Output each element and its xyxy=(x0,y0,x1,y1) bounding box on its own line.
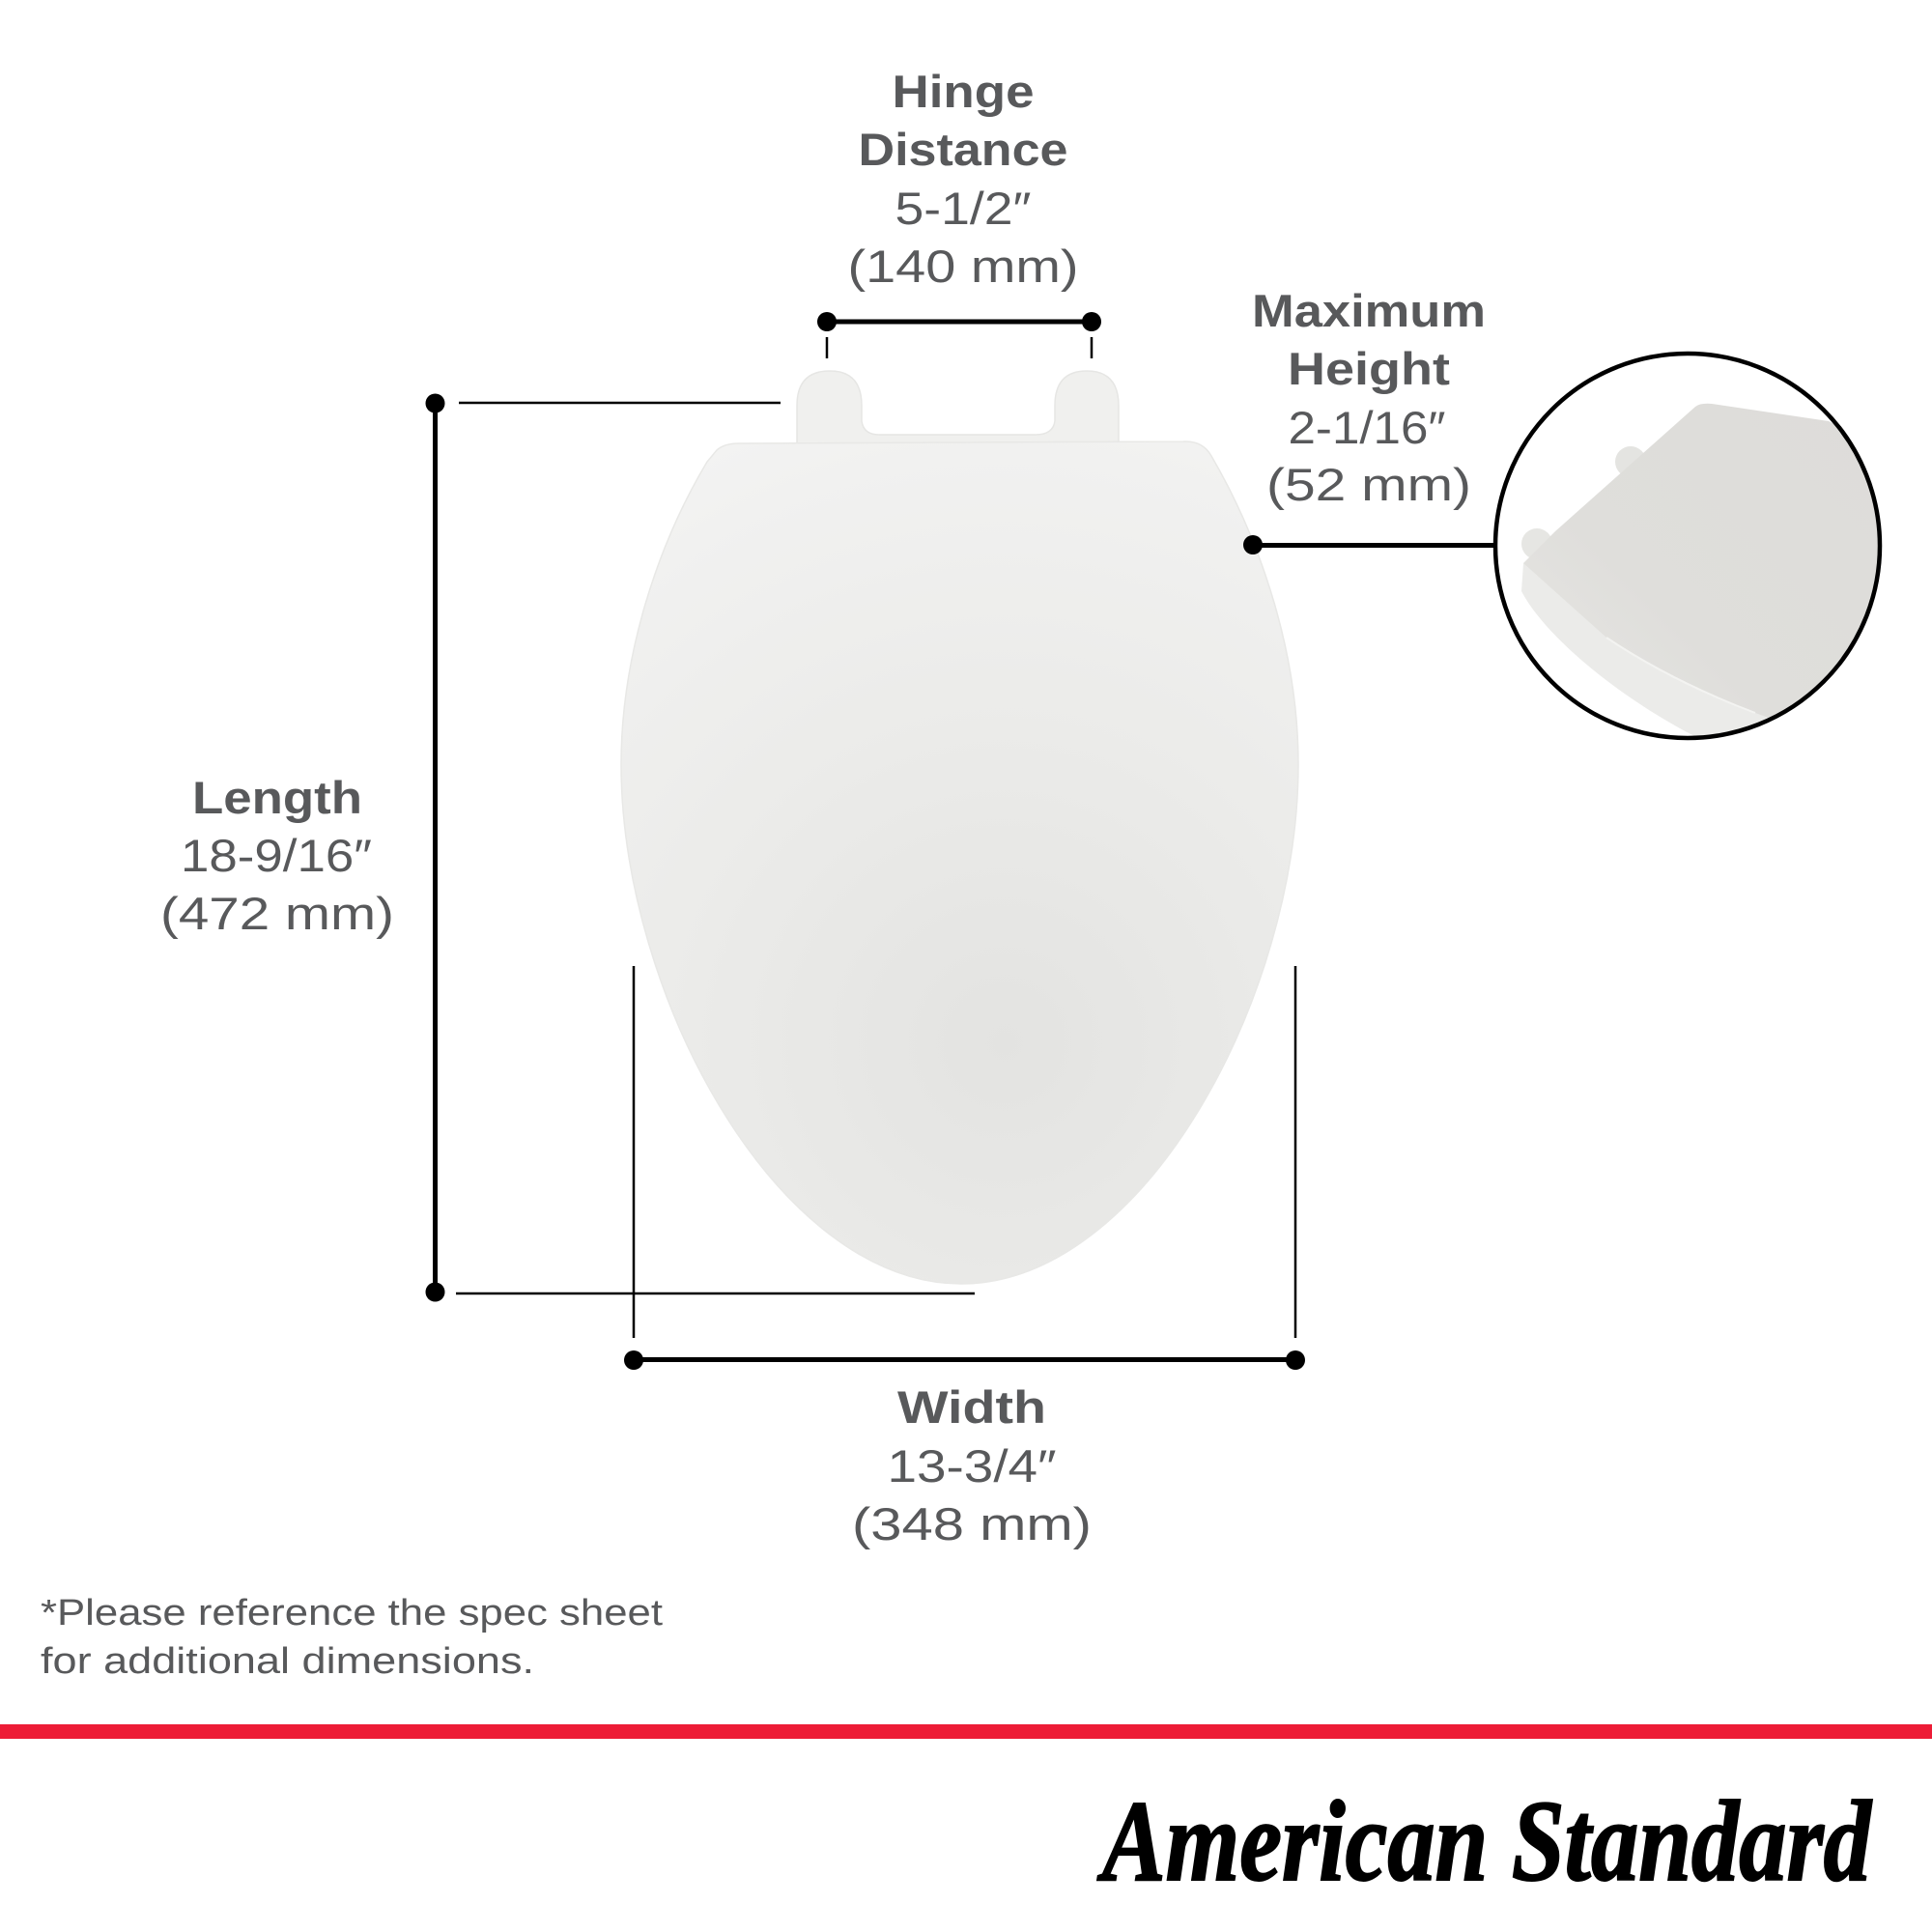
label: maximum height: Height xyxy=(1288,343,1450,394)
dimension: maximum height leader xyxy=(1243,535,1495,554)
label: maximum height xyxy=(1252,285,1486,510)
label: maximum height: (52 mm) xyxy=(1266,459,1471,510)
label: hinge distance xyxy=(848,66,1078,292)
dimension: length arrow xyxy=(425,394,975,1302)
toilet seat illustration xyxy=(621,371,1298,1284)
footnote: *Please reference the spec sheet xyxy=(41,1593,664,1634)
footnote: for additional dimensions. xyxy=(41,1641,534,1682)
label: width: 13-3/4″ xyxy=(887,1440,1057,1492)
label: width: Width xyxy=(897,1381,1046,1433)
hinge tabs xyxy=(797,371,1119,446)
label: length xyxy=(160,772,394,939)
label: maximum height: 2-1/16″ xyxy=(1289,402,1445,453)
label: hinge distance: Distance xyxy=(858,124,1068,175)
footnote xyxy=(41,1593,664,1682)
label: maximum height: Maximum xyxy=(1252,285,1486,336)
label: hinge distance: (140 mm) xyxy=(848,241,1078,292)
label: width: (348 mm) xyxy=(852,1498,1092,1549)
label: length: Length xyxy=(192,772,362,823)
seat lid xyxy=(621,441,1298,1284)
label: hinge distance: Hinge xyxy=(893,66,1034,117)
dimension: width arrow xyxy=(624,966,1305,1370)
red divider bar xyxy=(0,1724,1932,1739)
detail circle: seat height close-up xyxy=(1495,354,1893,763)
label: length: (472 mm) xyxy=(160,888,394,939)
label: hinge distance: 5-1/2″ xyxy=(895,183,1032,234)
label: width xyxy=(852,1381,1092,1549)
dimension: hinge distance arrow xyxy=(817,312,1101,358)
label: length: 18-9/16″ xyxy=(181,830,372,881)
close-up seat xyxy=(1521,404,1878,736)
